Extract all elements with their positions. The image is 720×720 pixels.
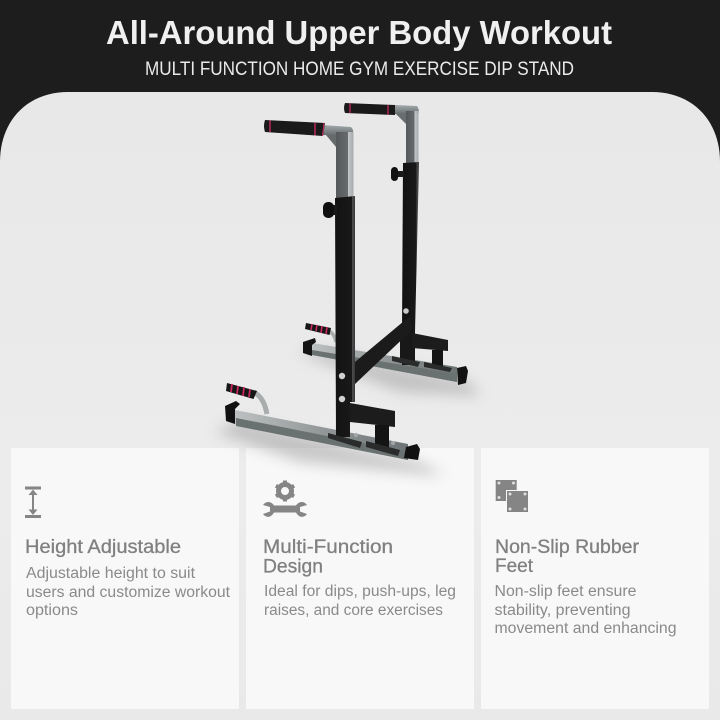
back base rail bbox=[303, 338, 468, 385]
front base rail bbox=[225, 401, 420, 460]
icon: gear and wrench bbox=[263, 480, 307, 517]
text: height adjustable description: users and customize workout bbox=[26, 584, 231, 601]
text: multi-function description: raises, and core exercises bbox=[264, 602, 443, 619]
back foot block bbox=[392, 333, 452, 372]
title: All-Around Upper Body Workout bbox=[106, 14, 612, 51]
heading: non-slip rubber feet: Non-Slip Rubber bbox=[495, 537, 640, 558]
heading: multi-function design: Multi-Function bbox=[263, 537, 393, 558]
front upright bbox=[264, 120, 355, 437]
product: dip stand bbox=[215, 103, 480, 476]
back upright bbox=[344, 103, 419, 365]
text: non-slip description: movement and enhancing bbox=[494, 620, 676, 637]
heading: height adjustable: Height Adjustable bbox=[25, 537, 181, 558]
front small handle bbox=[226, 383, 267, 414]
front foot block bbox=[328, 403, 400, 456]
text: non-slip description bbox=[494, 583, 676, 637]
icon: height arrows bbox=[25, 486, 41, 518]
text: height adjustable description: Adjustable height to suit bbox=[26, 565, 196, 582]
text: multi-function description: Ideal for dips, push-ups, leg bbox=[264, 583, 456, 600]
floor shadows bbox=[215, 350, 480, 476]
panel: height adjustable bbox=[11, 448, 239, 709]
heading: non-slip rubber feet bbox=[495, 537, 640, 577]
cross brace bbox=[355, 316, 412, 384]
text: multi-function description bbox=[264, 583, 456, 619]
text: height adjustable description: options bbox=[26, 602, 78, 619]
heading: multi-function design: Design bbox=[263, 556, 323, 578]
text: height adjustable description bbox=[26, 565, 231, 619]
panel: non-slip rubber feet bbox=[481, 448, 709, 709]
back small handle bbox=[305, 323, 336, 342]
text: non-slip description: stability, preventing bbox=[494, 602, 630, 619]
icon: rubber feet pads bbox=[496, 480, 529, 513]
heading: non-slip rubber feet: Feet bbox=[495, 556, 534, 577]
panel: multi-function design bbox=[246, 448, 474, 709]
subtitle: MULTI FUNCTION HOME GYM EXERCISE DIP STAND bbox=[145, 59, 574, 80]
heading: multi-function design bbox=[263, 537, 393, 578]
text: non-slip description: Non-slip feet ensure bbox=[494, 583, 636, 600]
